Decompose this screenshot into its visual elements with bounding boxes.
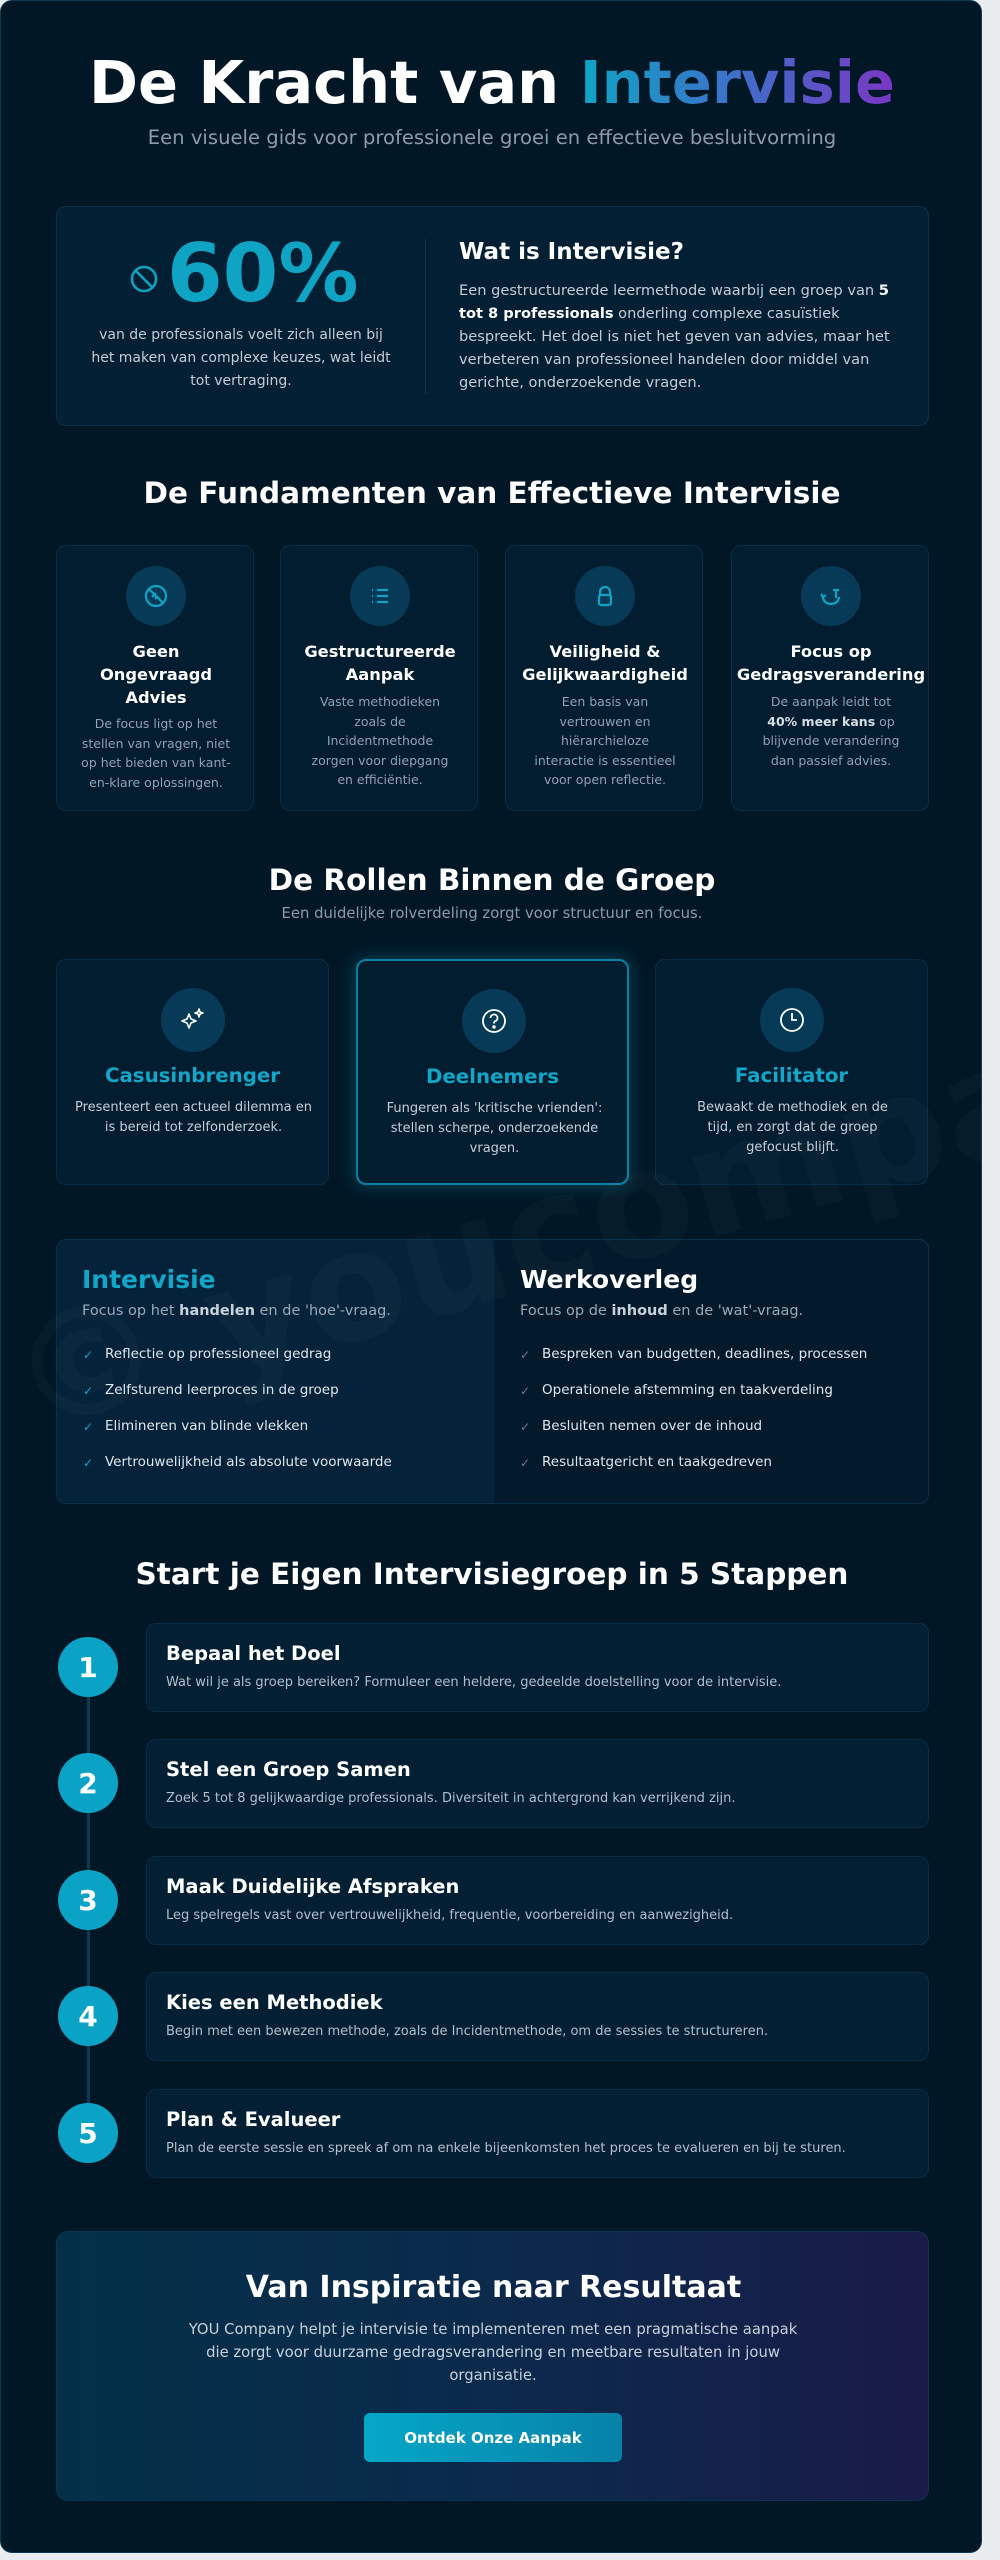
icon: question bbox=[462, 989, 526, 1053]
column: werkoverleg: Bespreken van budgetten, deadlines, processen bbox=[542, 1346, 867, 1362]
column: intervisie: Reflectie op professioneel gedrag bbox=[105, 1346, 331, 1362]
column: werkoverleg: Besluiten nemen over de inhoud bbox=[542, 1418, 762, 1434]
heading: rollen: De Rollen Binnen de Groep bbox=[269, 863, 715, 897]
panel: CTA bbox=[56, 2231, 929, 2501]
heading: fundamenten: De Fundamenten van Effectieve Intervisie bbox=[144, 476, 840, 510]
column: werkoverleg: Resultaatgericht en taakgedreven bbox=[542, 1454, 772, 1470]
panel: fundament 2 bbox=[280, 545, 478, 811]
panel: fundament 3: Veiligheid & bbox=[550, 642, 660, 661]
panel: facilitator: Facilitator bbox=[735, 1064, 848, 1087]
icon: lock bbox=[575, 566, 635, 626]
panel: casusinbrenger: Presenteert een actueel dilemma en is bereid tot zelfonderzoek. bbox=[75, 1100, 312, 1135]
step 3 bbox=[58, 1856, 929, 1945]
panel: fundament 2: Aanpak bbox=[346, 665, 414, 684]
icon: list bbox=[350, 566, 410, 626]
step 1 bbox=[58, 1623, 929, 1712]
panel: intro stat bbox=[56, 206, 929, 426]
step 5: Plan & Evalueer bbox=[166, 2108, 340, 2131]
subtitle: rollen: Een duidelijke rolverdeling zorgt voor structuur en focus. bbox=[282, 905, 702, 922]
step 1: Bepaal het Doel bbox=[166, 1642, 341, 1665]
step 2: Stel een Groep Samen bbox=[166, 1758, 411, 1781]
CTA heading: Van Inspiratie naar Resultaat bbox=[246, 2270, 741, 2305]
panel: facilitator bbox=[655, 959, 928, 1185]
panel: fundament 3 bbox=[505, 545, 703, 811]
column: intervisie: Focus op het handelen en de 'hoe'-vraag. bbox=[82, 1303, 391, 1319]
column: werkoverleg: Operationele afstemming en taakverdeling bbox=[542, 1382, 833, 1398]
panel: deelnemers: Fungeren als 'kritische vrienden': stellen scherpe, onderzoekende vragen. bbox=[387, 1101, 602, 1156]
panel: fundament 1 bbox=[56, 545, 254, 811]
panel: fundament 3: Een basis van vertrouwen en hiërarchieloze interactie is essentieel voor open reflectie. bbox=[534, 694, 676, 787]
step 2 bbox=[58, 1739, 929, 1828]
stat number: 60% bbox=[167, 227, 358, 320]
panel: fundament 1: Geen bbox=[132, 642, 180, 661]
step 3: 3 bbox=[78, 1884, 98, 1916]
column: intervisie: ✓ bbox=[83, 1348, 93, 1362]
panel: fundament 1: De focus ligt op het stellen van vragen, niet op het bieden van kant-en-klare oplossingen. bbox=[81, 716, 231, 790]
icon: sparkles bbox=[161, 988, 225, 1052]
step 4 bbox=[58, 1972, 929, 2061]
column: intervisie: Vertrouwelijkheid als absolute voorwaarde bbox=[105, 1454, 392, 1470]
subtitle: Een visuele gids voor professionele groei en effectieve besluitvorming bbox=[148, 126, 836, 149]
panel: fundament 3: Gelijkwaardigheid bbox=[522, 665, 688, 684]
step 5: 5 bbox=[78, 2116, 98, 2150]
panel: fundament 2: Gestructureerde bbox=[304, 642, 456, 661]
column: werkoverleg: Werkoverleg bbox=[520, 1265, 698, 1294]
title: De Kracht van Intervisie bbox=[89, 48, 895, 117]
column: intervisie: ✓ bbox=[83, 1420, 93, 1434]
step 5: Plan de eerste sessie en spreek af om na enkele bijeenkomsten het proces te evalueren en bij te sturen. bbox=[166, 2141, 846, 2156]
step 4: Kies een Methodiek bbox=[166, 1991, 383, 2014]
panel: fundament 1: Advies bbox=[125, 688, 187, 707]
icon: prohibited bbox=[130, 266, 158, 292]
panel: fundament 2: Vaste methodieken zoals de Incidentmethode zorgen voor diepgang en efficiëntie. bbox=[312, 694, 448, 787]
step 2: 2 bbox=[78, 1766, 98, 1800]
icon: clock bbox=[760, 988, 824, 1052]
text block: Een gestructureerde leermethode waarbij een groep van 5 tot 8 professionals onderling complexe casuïstiek bespreekt. Het doel is niet het geven van advies, maar het verbeteren van professioneel handelen door middel van gerichte, onderzoekende vragen. bbox=[459, 282, 890, 391]
column: intervisie bbox=[57, 1240, 494, 1505]
step 3: Maak Duidelijke Afspraken bbox=[166, 1875, 459, 1898]
column: intervisie: Zelfsturend leerproces in de groep bbox=[105, 1382, 339, 1398]
CTA button: Ontdek Onze Aanpak bbox=[404, 2428, 582, 2446]
icon: change bbox=[801, 566, 861, 626]
step 1: Wat wil je als groep bereiken? Formuleer een heldere, gedeelde doelstelling voor de intervisie. bbox=[166, 1675, 781, 1690]
column: intervisie: Intervisie bbox=[82, 1265, 216, 1294]
panel: fundament 4: Focus op bbox=[790, 642, 872, 661]
stat text: van de professionals voelt zich alleen bij het maken van complexe keuzes, wat leidt tot vertraging. bbox=[91, 327, 391, 389]
panel: fundament 4: De aanpak leidt tot 40% meer kans op blijvende verandering dan passief advies. bbox=[763, 694, 899, 768]
panel: fundament 4 bbox=[731, 545, 929, 811]
panel: comparison bbox=[56, 1239, 929, 1504]
column: werkoverleg bbox=[520, 1265, 867, 1470]
column: werkoverleg: ✓ bbox=[520, 1420, 530, 1434]
panel: deelnemers bbox=[356, 959, 629, 1185]
panel: deelnemers: Deelnemers bbox=[426, 1065, 559, 1088]
panel: facilitator: Bewaakt de methodiek en de tijd, en zorgt dat de groep gefocust blijft. bbox=[697, 1100, 888, 1155]
step 4: Begin met een bewezen methode, zoals de Incidentmethode, om de sessies te structureren. bbox=[166, 2024, 768, 2039]
panel: casusinbrenger: Casusinbrenger bbox=[105, 1064, 280, 1087]
step 2: Zoek 5 tot 8 gelijkwaardige professionals. Diversiteit in achtergrond kan verrijkend zijn. bbox=[166, 1791, 736, 1806]
step 3: Leg spelregels vast over vertrouwelijkheid, frequentie, voorbereiding en aanwezigheid. bbox=[166, 1908, 733, 1923]
icon: no advice bbox=[126, 566, 186, 626]
panel: casusinbrenger bbox=[56, 959, 329, 1185]
column: intervisie: ✓ bbox=[83, 1456, 93, 1470]
step 4: 4 bbox=[78, 2000, 98, 2032]
panel: fundament 4: Gedragsverandering bbox=[737, 665, 925, 684]
column: werkoverleg: ✓ bbox=[520, 1348, 530, 1362]
panel: fundament 1: Ongevraagd bbox=[100, 665, 212, 684]
column: werkoverleg: ✓ bbox=[520, 1384, 530, 1398]
heading: wat is intervisie: Wat is Intervisie? bbox=[459, 239, 684, 265]
column: werkoverleg: ✓ bbox=[520, 1456, 530, 1470]
column: intervisie: ✓ bbox=[83, 1384, 93, 1398]
CTA text: YOU Company helpt je intervisie te implementeren met een pragmatische aanpak die zorgt voor duurzame gedragsverandering en meetbare resultaten in jouw organisatie. bbox=[189, 2321, 797, 2384]
CTA button bbox=[364, 2413, 622, 2462]
step 1: 1 bbox=[78, 1650, 98, 1684]
column: werkoverleg: Focus op de inhoud en de 'wat'-vraag. bbox=[520, 1303, 803, 1319]
step 5 bbox=[58, 2089, 929, 2178]
heading: stappen: Start je Eigen Intervisiegroep in 5 Stappen bbox=[136, 1557, 848, 1591]
timeline line bbox=[87, 1668, 90, 2138]
column: intervisie: Elimineren van blinde vlekken bbox=[105, 1418, 308, 1434]
